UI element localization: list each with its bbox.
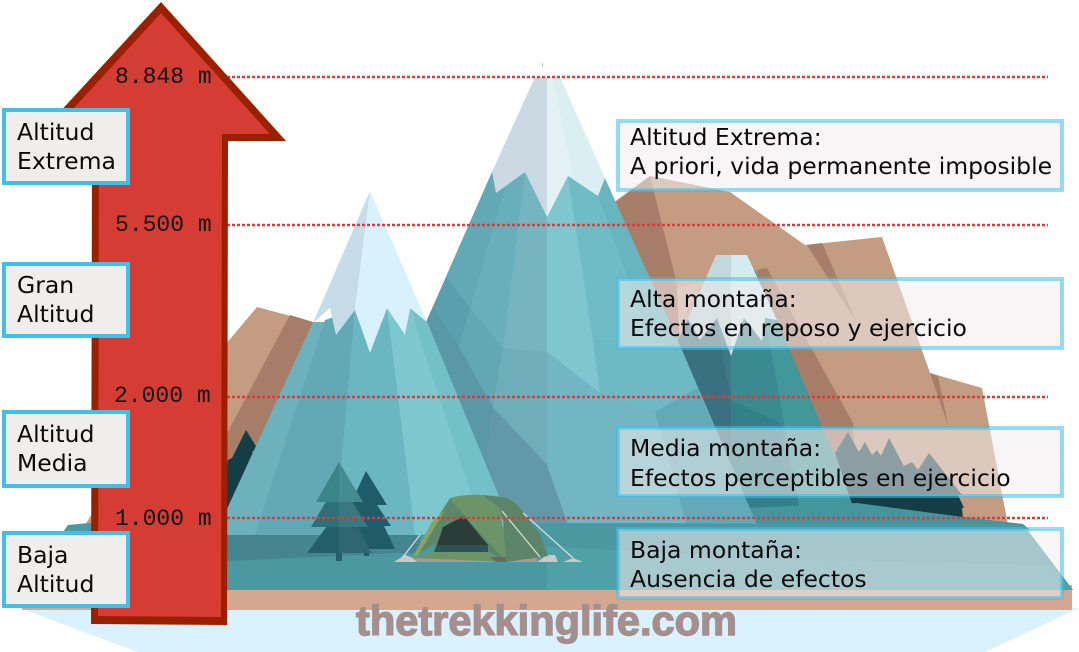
panel: Media montaña description: Efectos perceptibles en ejercicio bbox=[630, 464, 1011, 492]
box: Altitud Media: Altitud bbox=[17, 420, 94, 448]
ground slab bbox=[22, 585, 1072, 610]
panel: Altitud Extrema description bbox=[618, 121, 1062, 190]
box: Altitud Media bbox=[4, 412, 128, 486]
main mountain bbox=[400, 63, 757, 525]
label 8848: 8.848 m bbox=[115, 64, 212, 90]
pine tree front bbox=[307, 462, 372, 561]
panel: Baja montaña description bbox=[618, 529, 1062, 598]
trees behind the right shore bbox=[835, 432, 964, 519]
box: Baja Altitud bbox=[4, 533, 128, 606]
label 2000: 2.000 m bbox=[114, 383, 211, 409]
label 5500: 5.500 m bbox=[115, 212, 212, 238]
panel: Altitud Extrema description: Altitud Extrema: bbox=[630, 123, 822, 151]
box: Altitud Media: Media bbox=[17, 449, 88, 477]
pine tree back bbox=[339, 471, 395, 556]
brown mountain left bbox=[85, 307, 313, 525]
panel: Alta montaña description bbox=[618, 279, 1062, 348]
altitude guide lines bbox=[222, 77, 1048, 518]
box: Gran Altitud: Altitud bbox=[17, 300, 94, 328]
box: Gran Altitud bbox=[4, 264, 128, 336]
left mountain bbox=[215, 191, 515, 535]
panel: Baja montaña description: Baja montaña: bbox=[630, 536, 802, 564]
dark tree left bbox=[215, 430, 270, 540]
ground bbox=[22, 522, 1073, 590]
panel: Media montaña description bbox=[618, 428, 1062, 496]
box: Baja Altitud: Altitud bbox=[17, 570, 94, 598]
panel: Altitud Extrema description: A priori, vida permanente imposible bbox=[630, 152, 1052, 180]
floor reflection bbox=[22, 608, 1079, 652]
watermark: thetrekkinglife.com bbox=[356, 597, 737, 644]
panel: Alta montaña description: Alta montaña: bbox=[630, 285, 797, 313]
box: Baja Altitud: Baja bbox=[17, 541, 68, 569]
box: Altitud Extrema: Extrema bbox=[17, 147, 116, 175]
label 1000: 1.000 m bbox=[115, 506, 212, 532]
box: Gran Altitud: Gran bbox=[17, 271, 74, 299]
panel: Baja montaña description: Ausencia de efectos bbox=[630, 565, 867, 593]
brown mountain right bbox=[610, 176, 1008, 525]
box: Altitud Extrema bbox=[4, 110, 128, 183]
ground back right bbox=[700, 503, 1030, 530]
main mountain snow bbox=[492, 63, 605, 217]
tent bbox=[394, 495, 583, 562]
altitude arrow bbox=[33, 2, 286, 625]
panel: Alta montaña description: Efectos en reposo y ejercicio bbox=[630, 314, 967, 342]
panel: Media montaña description: Media montaña: bbox=[630, 434, 821, 462]
box: Altitud Extrema: Altitud bbox=[17, 118, 94, 146]
altitude labels bbox=[114, 64, 212, 532]
back mountain bbox=[640, 255, 857, 520]
left mountain snow bbox=[313, 191, 427, 353]
